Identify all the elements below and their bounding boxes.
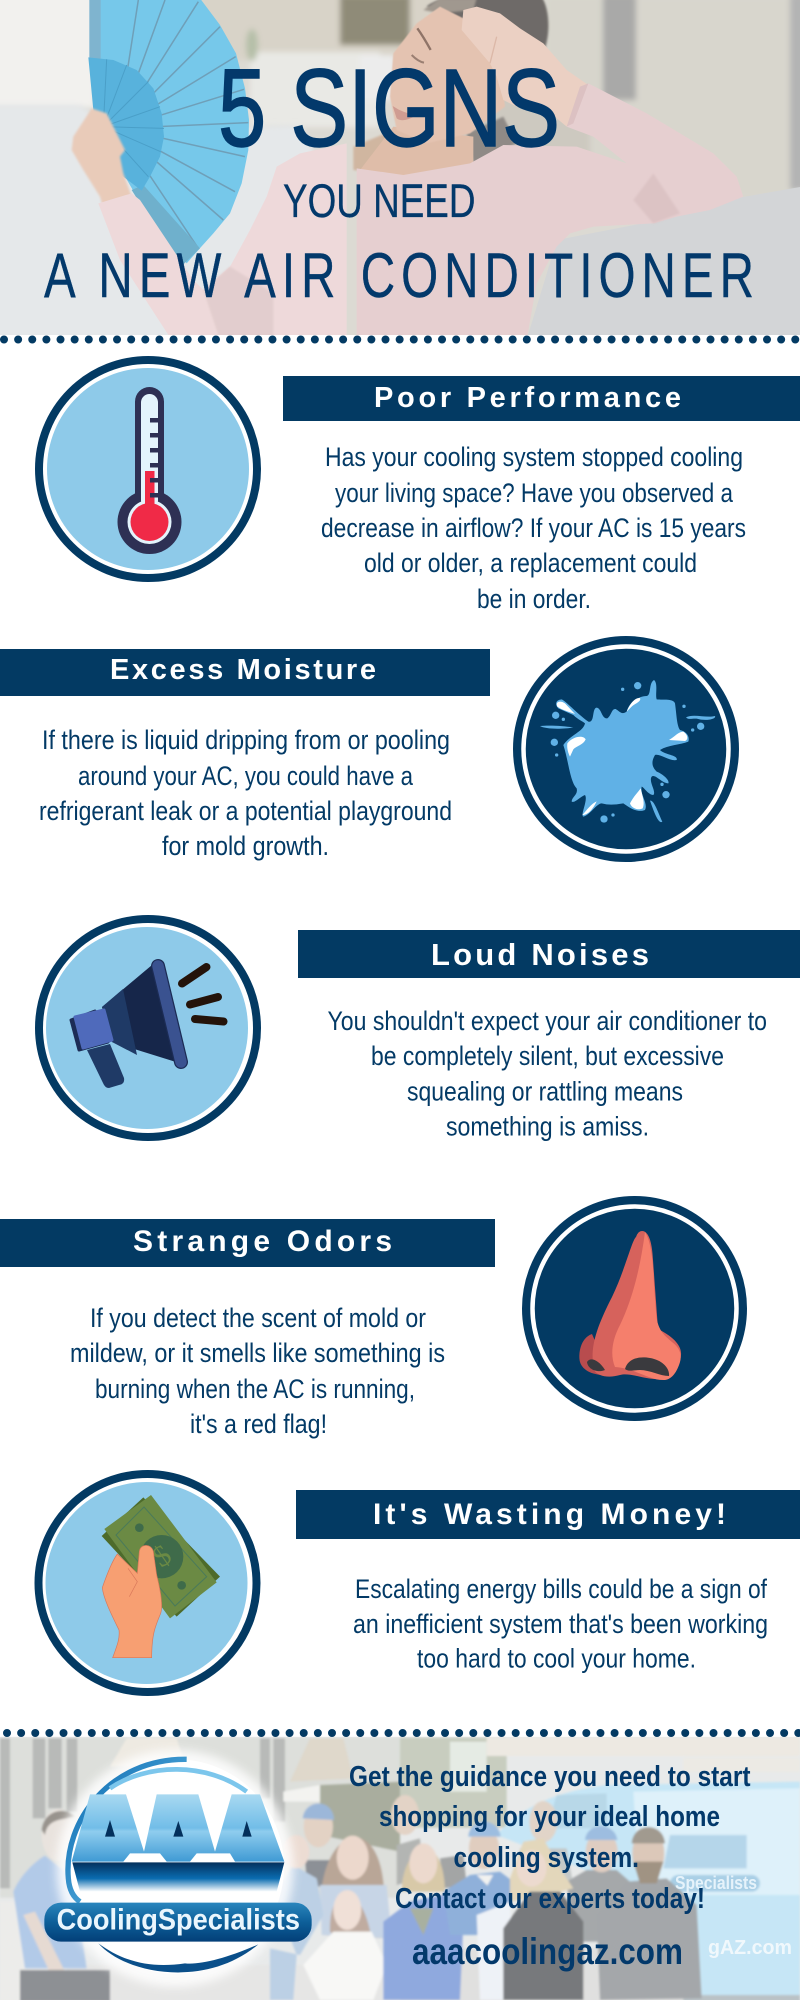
umbrellas	[110, 1738, 185, 1767]
website url: aaacoolingaz.com	[412, 1931, 683, 1972]
footer section	[0, 1737, 800, 2000]
body text: excess moisture	[39, 725, 452, 861]
panel: excess moisture	[0, 640, 735, 861]
footer photo: team in front of van	[0, 1737, 800, 2000]
body text: excess moisture: around your AC, you could have a	[78, 761, 414, 791]
icon: hand holding money: $	[146, 1538, 178, 1574]
body text: poor performance	[321, 442, 746, 614]
body text: poor performance: old or older, a replacement could	[364, 548, 697, 578]
call to action text: cooling system.	[454, 1842, 639, 1874]
heading bar: Poor Performance	[283, 376, 800, 421]
logo: AAA Cooling Specialists	[44, 1750, 312, 1987]
panel: loud noises	[39, 919, 800, 1142]
body text: poor performance: your living space? Have you observed a	[335, 478, 734, 508]
panel: poor performance	[39, 360, 800, 614]
neck	[360, 127, 473, 177]
body text: strange odors	[70, 1303, 445, 1439]
heading bar: Strange Odors	[0, 1219, 495, 1267]
heading bar: Loud Noises: Loud Noises	[431, 937, 649, 972]
cap man	[305, 1860, 340, 1895]
heading bar: It's Wasting Money!	[296, 1490, 800, 1539]
left blonde woman	[402, 1849, 445, 1892]
cap man in blue polo	[443, 1872, 513, 1935]
bearded man	[597, 1878, 702, 2000]
body text: excess moisture: for mold growth.	[162, 831, 329, 861]
hand on fan	[72, 108, 132, 208]
call to action text: Contact our experts today!	[395, 1883, 705, 1915]
cap man 2	[567, 1870, 630, 1942]
body text: loud noises: squealing or rattling means	[407, 1076, 683, 1106]
icon: water splash	[517, 640, 735, 858]
title: 5 SIGNS: 5 SIGNS	[218, 47, 560, 170]
fan	[72, 0, 347, 340]
left sofa	[0, 108, 314, 335]
faded van lettering	[675, 1873, 792, 1959]
icon: megaphone	[39, 919, 257, 1137]
left sleeve and torso	[98, 143, 347, 340]
body text: strange odors: it's a red flag!	[190, 1409, 327, 1439]
body text: excess moisture: refrigerant leak or a potential playground	[39, 796, 452, 826]
icon: hand holding money	[38, 1474, 256, 1692]
body text: wasting money: too hard to cool your home.	[417, 1644, 696, 1674]
body text: poor performance: be in order.	[477, 584, 591, 614]
heading bar: Excess Moisture: Excess Moisture	[110, 654, 376, 686]
child in blue	[270, 1865, 323, 2000]
hero section	[0, 0, 800, 345]
body text: wasting money	[353, 1574, 768, 1674]
girl	[330, 1894, 375, 1968]
hero photo: woman fanning herself	[0, 0, 800, 345]
body text: strange odors: burning when the AC is running,	[95, 1374, 415, 1404]
body text: strange odors: mildew, or it smells like something is	[70, 1338, 445, 1368]
heading bar: Poor Performance: Poor Performance	[374, 382, 681, 414]
panel: strange odors	[0, 1200, 743, 1439]
sweater and raised arm	[357, 83, 743, 340]
body text: strange odors: If you detect the scent of mold or	[90, 1303, 426, 1333]
woman middle	[322, 1837, 390, 1938]
body text: excess moisture: If there is liquid dripping from or pooling	[42, 725, 450, 755]
body text: loud noises: be completely silent, but excessive	[371, 1041, 724, 1071]
call to action text	[349, 1761, 751, 1972]
hair	[426, 0, 550, 47]
right sofa	[525, 187, 800, 345]
subtitle: YOU NEED: YOU NEED	[283, 174, 476, 227]
raised hand	[462, 7, 588, 127]
heading bar: Strange Odors: Strange Odors	[133, 1225, 392, 1258]
heading bar: It's Wasting Money!: It's Wasting Money!	[373, 1498, 726, 1531]
panel: wasting money	[38, 1474, 800, 1692]
blonde woman with black jacket	[477, 1902, 515, 2000]
body text: loud noises: something is amiss.	[446, 1112, 649, 1142]
left man	[13, 1856, 87, 1968]
heading bar: Loud Noises	[298, 930, 800, 978]
icon: thermometer	[39, 360, 257, 578]
faded van lettering: gAZ.com	[708, 1937, 792, 1959]
icon: nose	[526, 1200, 743, 1417]
posts	[0, 1738, 285, 1888]
face	[390, 7, 505, 143]
logo: AAA Cooling Specialists: CoolingSpecialists	[57, 1903, 300, 1936]
men behind	[397, 1838, 423, 1885]
heading bar: Excess Moisture	[0, 649, 490, 696]
body text: loud noises	[328, 1006, 767, 1142]
call to action text: shopping for your ideal home	[379, 1801, 720, 1833]
van	[497, 1782, 800, 1995]
faded van lettering: Specialists	[675, 1873, 757, 1893]
